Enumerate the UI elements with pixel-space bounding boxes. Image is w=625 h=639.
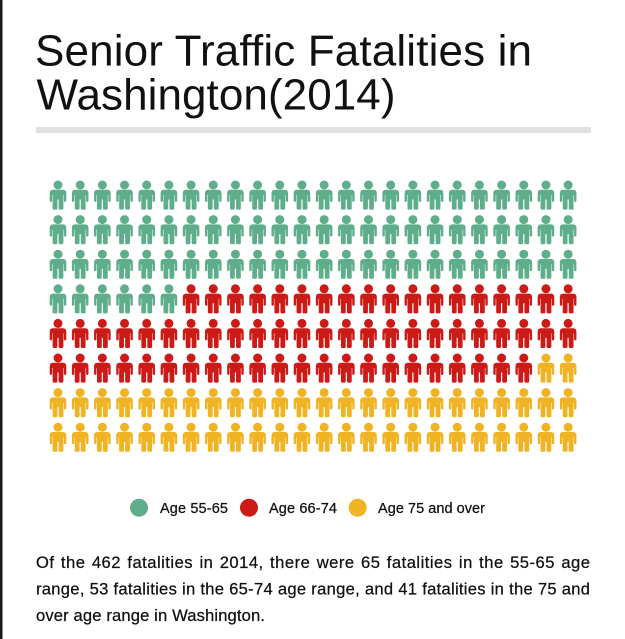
title: Senior Traffic Fatalities in (35, 26, 532, 76)
title: Washington(2014) (36, 70, 396, 120)
legend item: age 66-74: Age 66-74 (269, 501, 337, 517)
description text: over age range in Washington. (36, 606, 265, 625)
legend item: age 75 and over (349, 499, 485, 517)
legend item: age 75 and over: Age 75 and over (378, 501, 485, 517)
people: age 66-74 (red) (50, 284, 576, 383)
pictogram chart: people by age group (50, 180, 576, 452)
people: age 75 and over (yellow) (50, 354, 576, 452)
title (35, 26, 532, 120)
description text (36, 553, 590, 625)
description text: range, 53 fatalities in the 65-74 age range, and 41 fatalities in the 75 and (36, 580, 590, 598)
legend item: age 55-65 (130, 499, 228, 517)
legend item: age 55-65: Age 55-65 (160, 501, 228, 517)
people: age 55-65 (green) (50, 180, 576, 313)
legend (130, 499, 485, 517)
legend item: age 66-74 (240, 499, 337, 517)
description text: Of the 462 fatalities in 2014, there were 65 fatalities in the 55-65 age (36, 553, 590, 572)
